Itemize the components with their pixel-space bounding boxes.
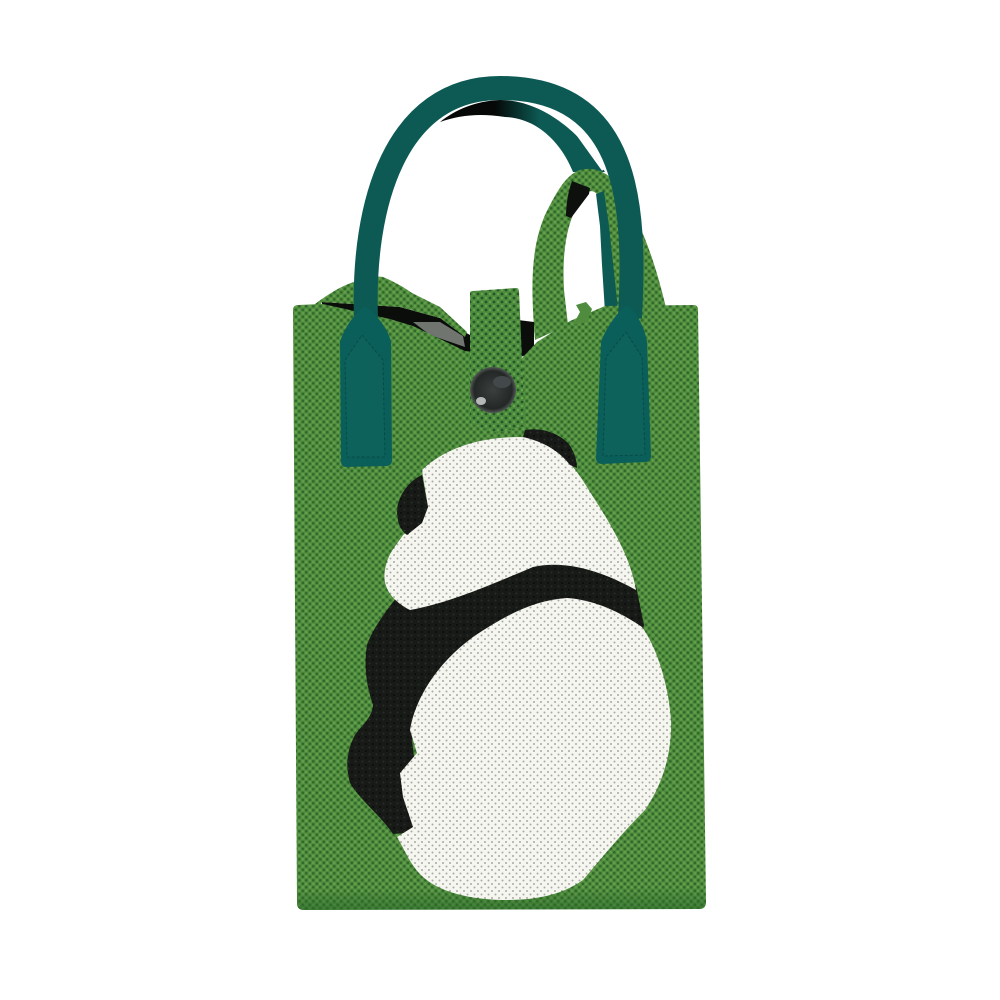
bag interior [322, 302, 534, 358]
panda: black band and left side [347, 560, 644, 834]
bag body [293, 304, 706, 910]
front handle [366, 88, 632, 318]
right leather handle tab [596, 305, 651, 464]
back handle lower section [596, 191, 618, 312]
panda: top ear [523, 429, 577, 468]
left leather handle tab [340, 307, 392, 467]
shoulder strap loop [532, 169, 667, 340]
panda: head and upper body [384, 437, 636, 610]
panda: left ear [397, 475, 428, 535]
icon: metal snap button [470, 367, 516, 413]
back flap of the bag [310, 277, 467, 337]
loose thread [573, 302, 592, 325]
panda: lower body [397, 598, 671, 900]
back handle upper arc [440, 100, 605, 172]
strap tab with snap [470, 288, 525, 433]
